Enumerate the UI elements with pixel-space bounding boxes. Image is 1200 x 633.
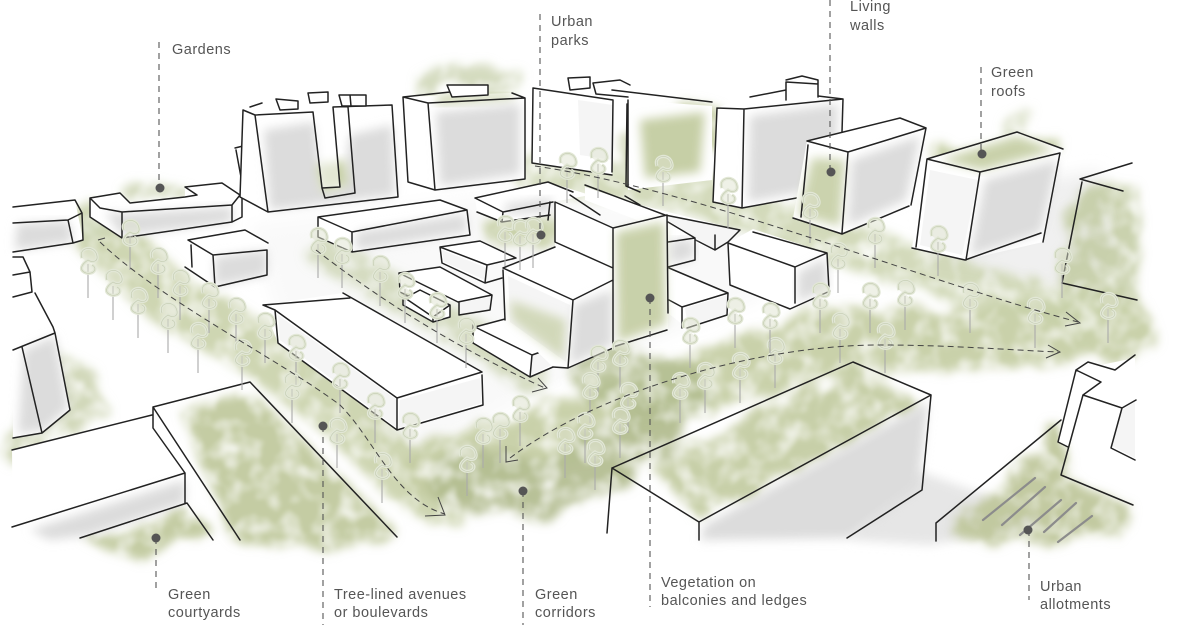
callout: Tree-lined avenues or boulevards: Tree-lined avenues — [334, 587, 467, 603]
building: vegetated tower — [503, 195, 668, 368]
building: courtyard left block — [12, 382, 397, 540]
callout: Tree-lined avenues or boulevards — [318, 422, 467, 625]
building: tower with roof box — [713, 76, 843, 208]
callout: Green roofs: roofs — [991, 84, 1026, 100]
building: far right block — [1062, 163, 1137, 300]
callout: Green courtyards: Green — [168, 587, 211, 603]
building: green roof block — [912, 132, 1063, 260]
callout: Gardens: Gardens — [172, 42, 231, 58]
callout: Urban allotments — [1024, 526, 1111, 613]
building: mid right block — [728, 229, 830, 309]
building: grey side block — [668, 222, 695, 267]
building: small bar north — [475, 182, 590, 222]
callout: Tree-lined avenues or boulevards: or boulevards — [334, 605, 428, 621]
callout: Green roofs — [978, 65, 1034, 158]
building: low bar beside tower — [668, 268, 728, 328]
building: small block — [185, 230, 268, 287]
callout: Urban allotments: Urban — [1040, 579, 1082, 595]
callout: Gardens — [156, 42, 231, 192]
building: upper block with side roof boxes — [532, 77, 630, 175]
building: large foreground roof — [607, 362, 931, 540]
building: stepped terrace blocks — [399, 241, 553, 377]
building: far left block — [13, 200, 83, 252]
building: left edge strip — [13, 257, 70, 438]
callout: Urban parks — [536, 14, 593, 240]
callout: Urban allotments: allotments — [1040, 597, 1111, 613]
callout: Vegetation on balconies and ledges: balconies and ledges — [661, 593, 807, 609]
callout: Green corridors: corridors — [535, 605, 596, 621]
callout: Vegetation on balconies and ledges: Vegetation on — [661, 575, 756, 591]
callout: Living walls — [826, 0, 891, 176]
dashed route arrows — [98, 166, 1080, 516]
building: large tower with notch — [235, 92, 398, 212]
building: garden long block — [90, 183, 242, 238]
building: street row bar — [585, 185, 740, 250]
callout: Green courtyards — [152, 534, 241, 621]
street trees — [81, 148, 1117, 503]
building: long mid bar — [317, 200, 470, 252]
callout: Green corridors: Green — [535, 587, 578, 603]
callout: Urban parks: Urban — [551, 14, 593, 30]
building: central tower — [403, 85, 525, 190]
building: right edge blocks — [936, 355, 1136, 541]
callout: Green courtyards: courtyards — [168, 605, 241, 621]
building: green wall block — [612, 90, 712, 192]
allotment furrows — [983, 478, 1092, 542]
callout: Urban parks: parks — [551, 33, 589, 49]
callout: Green roofs: Green — [991, 65, 1034, 81]
building: long roof block — [263, 293, 483, 430]
green vegetation washes — [10, 78, 1130, 555]
building: living walls block — [793, 118, 926, 234]
callout: Living walls: walls — [849, 18, 885, 34]
callout: Vegetation on balconies and ledges — [646, 294, 807, 609]
callout: Green corridors — [518, 486, 596, 625]
